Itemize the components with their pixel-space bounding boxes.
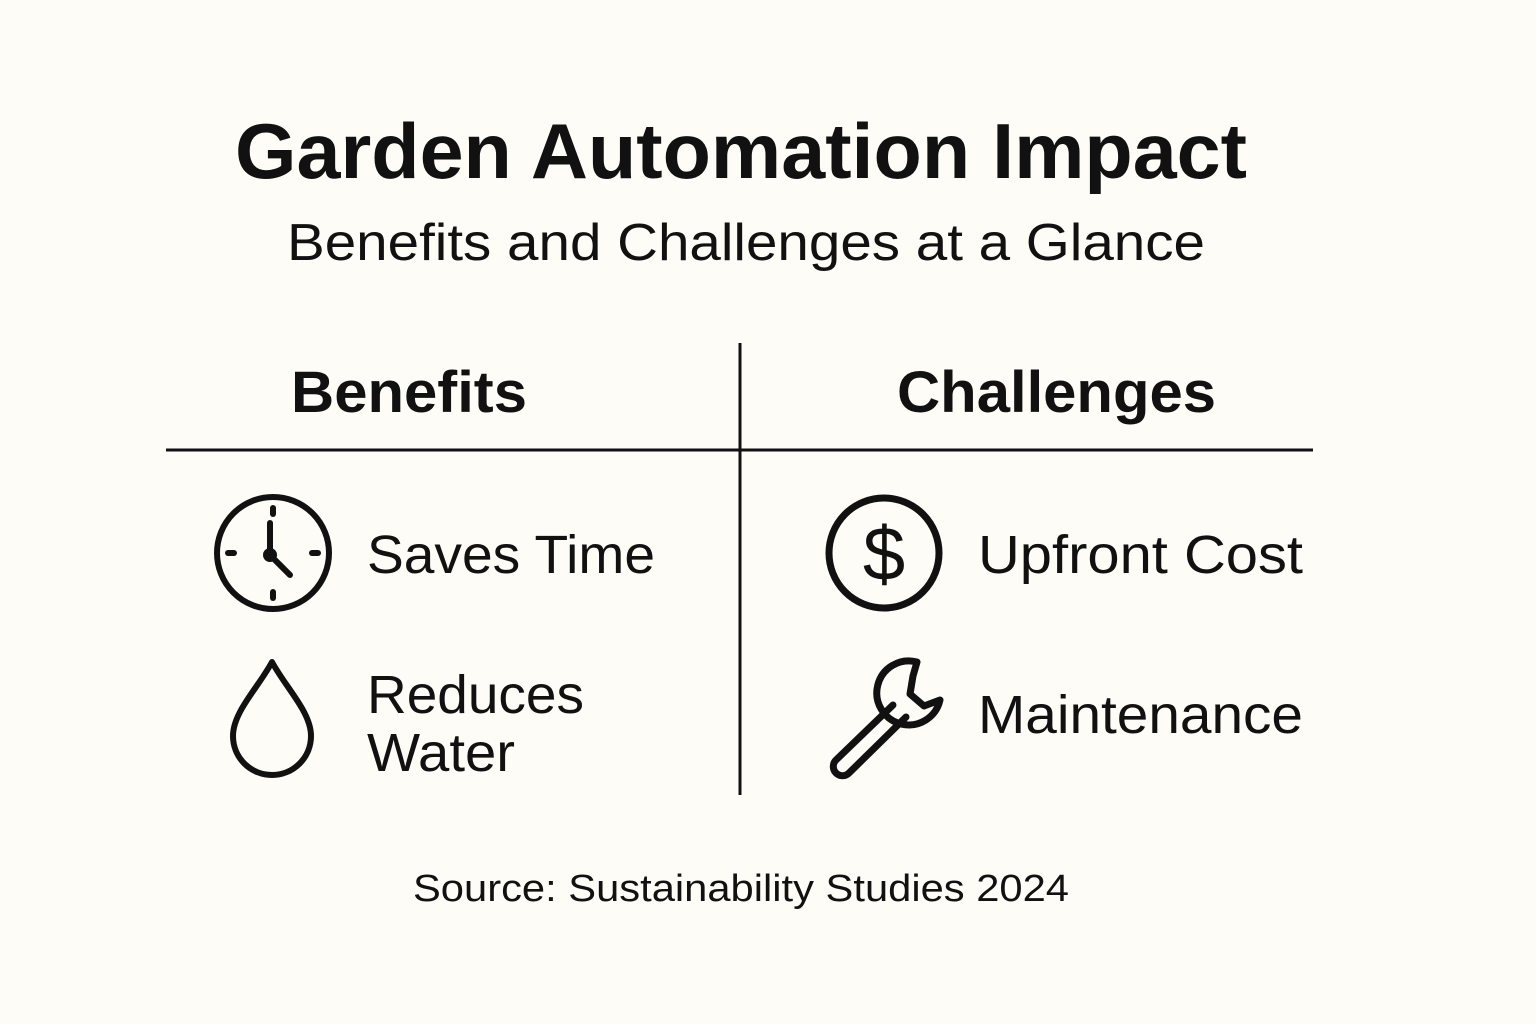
- text: reduces water: Water: [367, 723, 515, 783]
- subtitle: Benefits and Challenges at a Glance: [287, 214, 1205, 272]
- text: maintenance: Maintenance: [978, 685, 1303, 745]
- icon: dollar: [829, 498, 939, 608]
- text: reduces water: Reduces: [367, 665, 584, 725]
- heading: benefits: Benefits: [291, 360, 527, 425]
- icon: clock: [217, 497, 329, 609]
- text: upfront cost: Upfront Cost: [978, 525, 1303, 585]
- icon: dollar: $: [863, 512, 905, 597]
- title: Garden Automation Impact: [235, 107, 1247, 195]
- source: Source: Sustainability Studies 2024: [413, 868, 1069, 910]
- icon: wrench: [833, 661, 940, 776]
- text: reduces water: [367, 665, 584, 783]
- icon: water drop: [233, 662, 311, 775]
- heading: challenges: Challenges: [897, 360, 1216, 425]
- text: saves time: Saves Time: [367, 525, 655, 585]
